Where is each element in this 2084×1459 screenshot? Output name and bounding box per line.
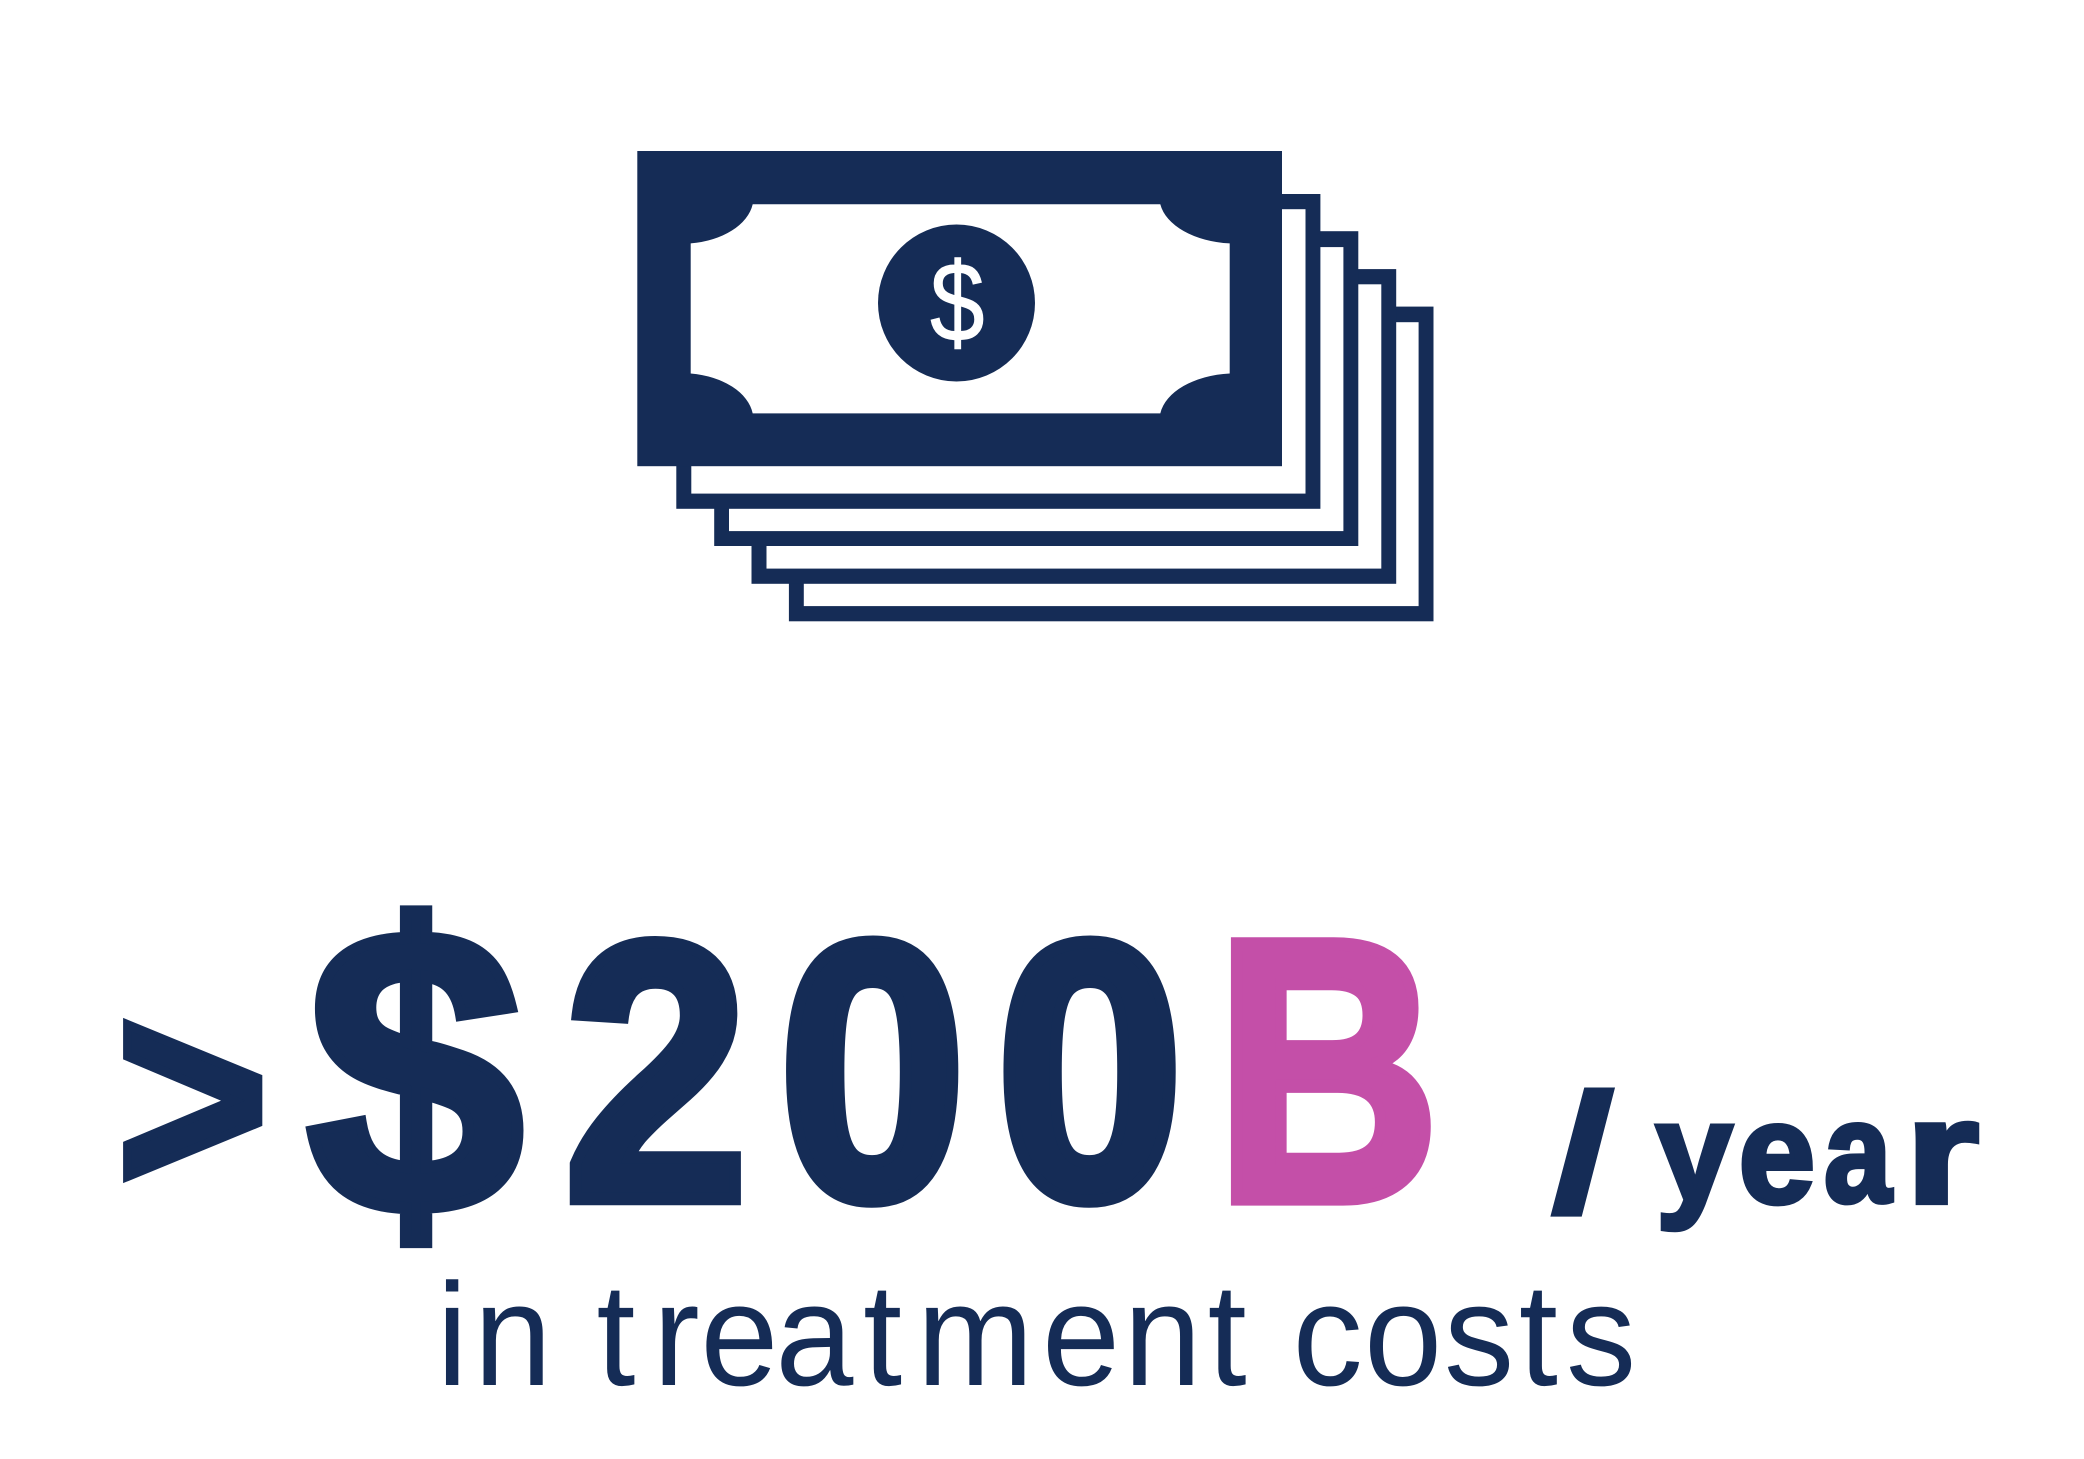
back bill 2: [714, 231, 1358, 546]
digit 0: 0: [779, 867, 966, 1276]
back bill 3: [752, 269, 1396, 584]
unit: year: [1656, 1069, 1979, 1234]
headline: >$200B / year: [117, 847, 1979, 1299]
unit: year: r: [1906, 1069, 1979, 1234]
back bill 1: [676, 194, 1320, 509]
icon: stack of money bills: [637, 151, 1434, 621]
front bill: [637, 151, 1282, 466]
dollar sign: $: [307, 847, 523, 1299]
unit: year: a: [1824, 1073, 1893, 1233]
back bill 4: [789, 307, 1434, 621]
digit 0: 0: [996, 867, 1183, 1276]
digit 2: 2: [564, 867, 749, 1278]
coin with dollar sign: [878, 224, 1035, 382]
greater-than sign: >: [117, 940, 268, 1254]
subheading: in treatment costs: in treatment costs: [437, 1253, 1636, 1417]
slash: /: [1550, 1059, 1615, 1249]
unit: year: e: [1739, 1073, 1815, 1233]
coin with dollar sign: $: [930, 241, 985, 366]
unit: year: y: [1656, 1073, 1732, 1231]
letter B in magenta: B: [1216, 865, 1439, 1278]
